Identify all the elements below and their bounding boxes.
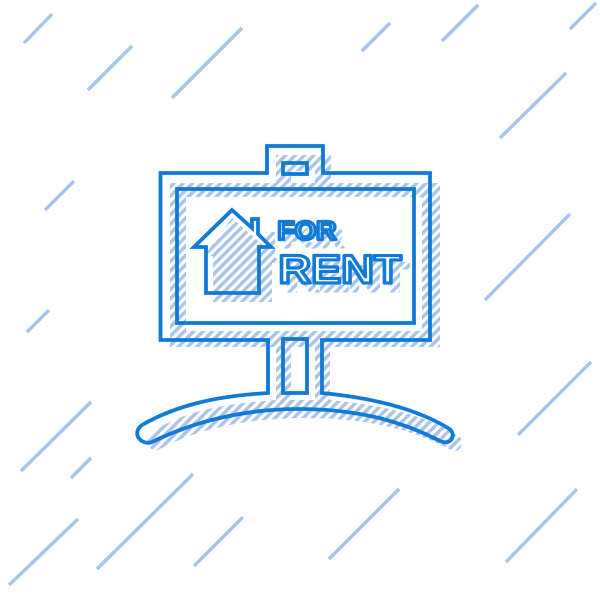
shadow: base <box>148 400 462 451</box>
for rent text <box>278 216 402 292</box>
shadow: house <box>204 218 281 302</box>
shadow: post <box>276 347 330 402</box>
shadow: top tab <box>276 155 331 183</box>
hatched shadow of sign <box>148 155 462 451</box>
shadow: for rent text <box>284 223 409 300</box>
shadow: board frame <box>170 183 440 347</box>
text: RENT: RENT <box>278 248 402 292</box>
board outline with tab <box>137 146 453 443</box>
shadow: for rent text: RENT <box>286 256 409 300</box>
text: FOR: FOR <box>278 216 337 246</box>
shadow: for rent text: FOR <box>284 223 343 253</box>
post slot <box>283 339 307 393</box>
icon: house <box>194 210 271 293</box>
small tab slot <box>283 163 307 174</box>
sign outline <box>137 146 453 443</box>
inner panel <box>177 189 414 323</box>
